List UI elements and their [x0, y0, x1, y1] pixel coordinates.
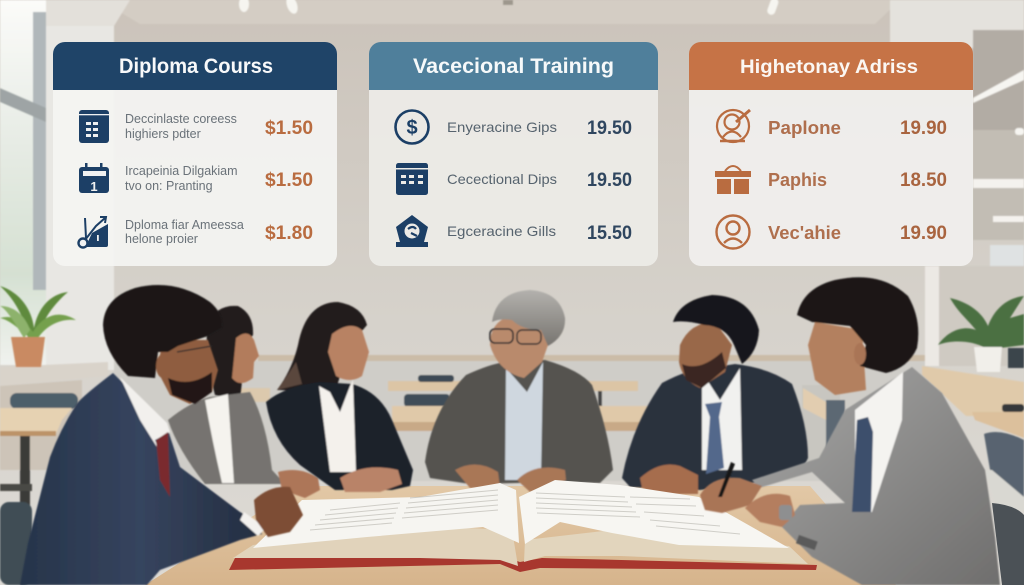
- panel 2 header bar: [369, 42, 658, 90]
- panel: Vocational Training: [369, 42, 658, 266]
- panel 1 header bar: Diploma Courss: [119, 55, 273, 78]
- background tables centre: [388, 381, 638, 391]
- book cover: [229, 556, 817, 572]
- icon: dollar circle: [396, 110, 428, 144]
- left desk: [0, 408, 72, 434]
- panel 2 header bar: Vacecional Training: [413, 55, 614, 78]
- person: front left man in navy suit: [20, 285, 303, 585]
- window sill and radiator: [0, 362, 108, 386]
- row text 2: Paphis: [768, 170, 827, 190]
- panel 3 header bar: [689, 42, 973, 90]
- plant: right: [938, 296, 1024, 372]
- price 3: 19.90: [900, 223, 947, 244]
- icon: calendar one: [79, 163, 109, 194]
- right wall and glass: [890, 0, 1024, 48]
- row text 1: Paplone: [768, 118, 841, 138]
- left page: [253, 483, 519, 548]
- row text 1: Deccinlaste coreess: [125, 112, 237, 126]
- row text 1: highiers pdter: [125, 127, 201, 141]
- front right chair: [992, 503, 1024, 585]
- icon: clock house: [396, 215, 428, 247]
- right background desks: [802, 385, 840, 470]
- row text 3: helone proier: [125, 232, 198, 246]
- panel 3 header bar: Highetonay Adriss: [740, 57, 918, 78]
- row text 2: Cecectional Dips: [447, 171, 557, 187]
- left wall: [46, 0, 114, 370]
- price 1: $1.50: [265, 118, 313, 139]
- icon: person target: [717, 110, 750, 142]
- price 3: $1.80: [265, 223, 313, 244]
- icon: person circle: [716, 216, 750, 248]
- icon: calendar one: 1: [90, 179, 98, 194]
- icon: calendar grid: [79, 110, 109, 143]
- person: older man in grey suit: [425, 290, 613, 492]
- page text lines: [310, 490, 740, 534]
- ceiling lights: [239, 0, 249, 12]
- ceiling: [100, 0, 900, 24]
- row text 1: Enyeracine Gips: [447, 119, 557, 135]
- price 1: 19.50: [587, 118, 632, 139]
- panel 2 card: [369, 90, 658, 266]
- chair left front: [0, 502, 32, 585]
- row text 3: Vec'ahie: [768, 223, 841, 243]
- row text 2: Ircapeinia Dilgakiam: [125, 164, 238, 178]
- person: young man in navy suit: [622, 295, 808, 494]
- person: woman in black blazer: [266, 302, 413, 492]
- plant: left: [0, 286, 76, 367]
- right page: [519, 480, 789, 548]
- left page edges: [233, 525, 518, 566]
- icon: dollar circle: $: [406, 117, 418, 139]
- icon: gift box: [715, 166, 751, 194]
- panel: Higher study: [689, 42, 973, 266]
- open book: [229, 480, 817, 572]
- window: [0, 0, 46, 365]
- price 3: 15.50: [587, 223, 632, 244]
- row text 3: Egceracine Gills: [447, 223, 556, 239]
- panel: Diploma Courses: [53, 42, 337, 266]
- row text 3: Dploma fiar Ameessa: [125, 218, 244, 232]
- panel 3 card: [689, 90, 973, 266]
- panel 1 header bar: [53, 42, 337, 90]
- price 1: 19.90: [900, 118, 947, 139]
- price 2: 19.50: [587, 170, 632, 191]
- icon: diploma chart: [78, 217, 108, 248]
- right page edges: [524, 530, 808, 564]
- conference table: [145, 486, 896, 585]
- row text 2: tvo on: Pranting: [125, 179, 213, 193]
- person: front right man in grey suit: [700, 277, 1000, 585]
- price 2: 18.50: [900, 170, 947, 191]
- panel 1 card: [53, 90, 337, 266]
- wainscot rail: [258, 355, 928, 361]
- icon: calendar: [396, 163, 428, 195]
- person: woman in grey jacket: [168, 306, 320, 498]
- price 2: $1.50: [265, 170, 313, 191]
